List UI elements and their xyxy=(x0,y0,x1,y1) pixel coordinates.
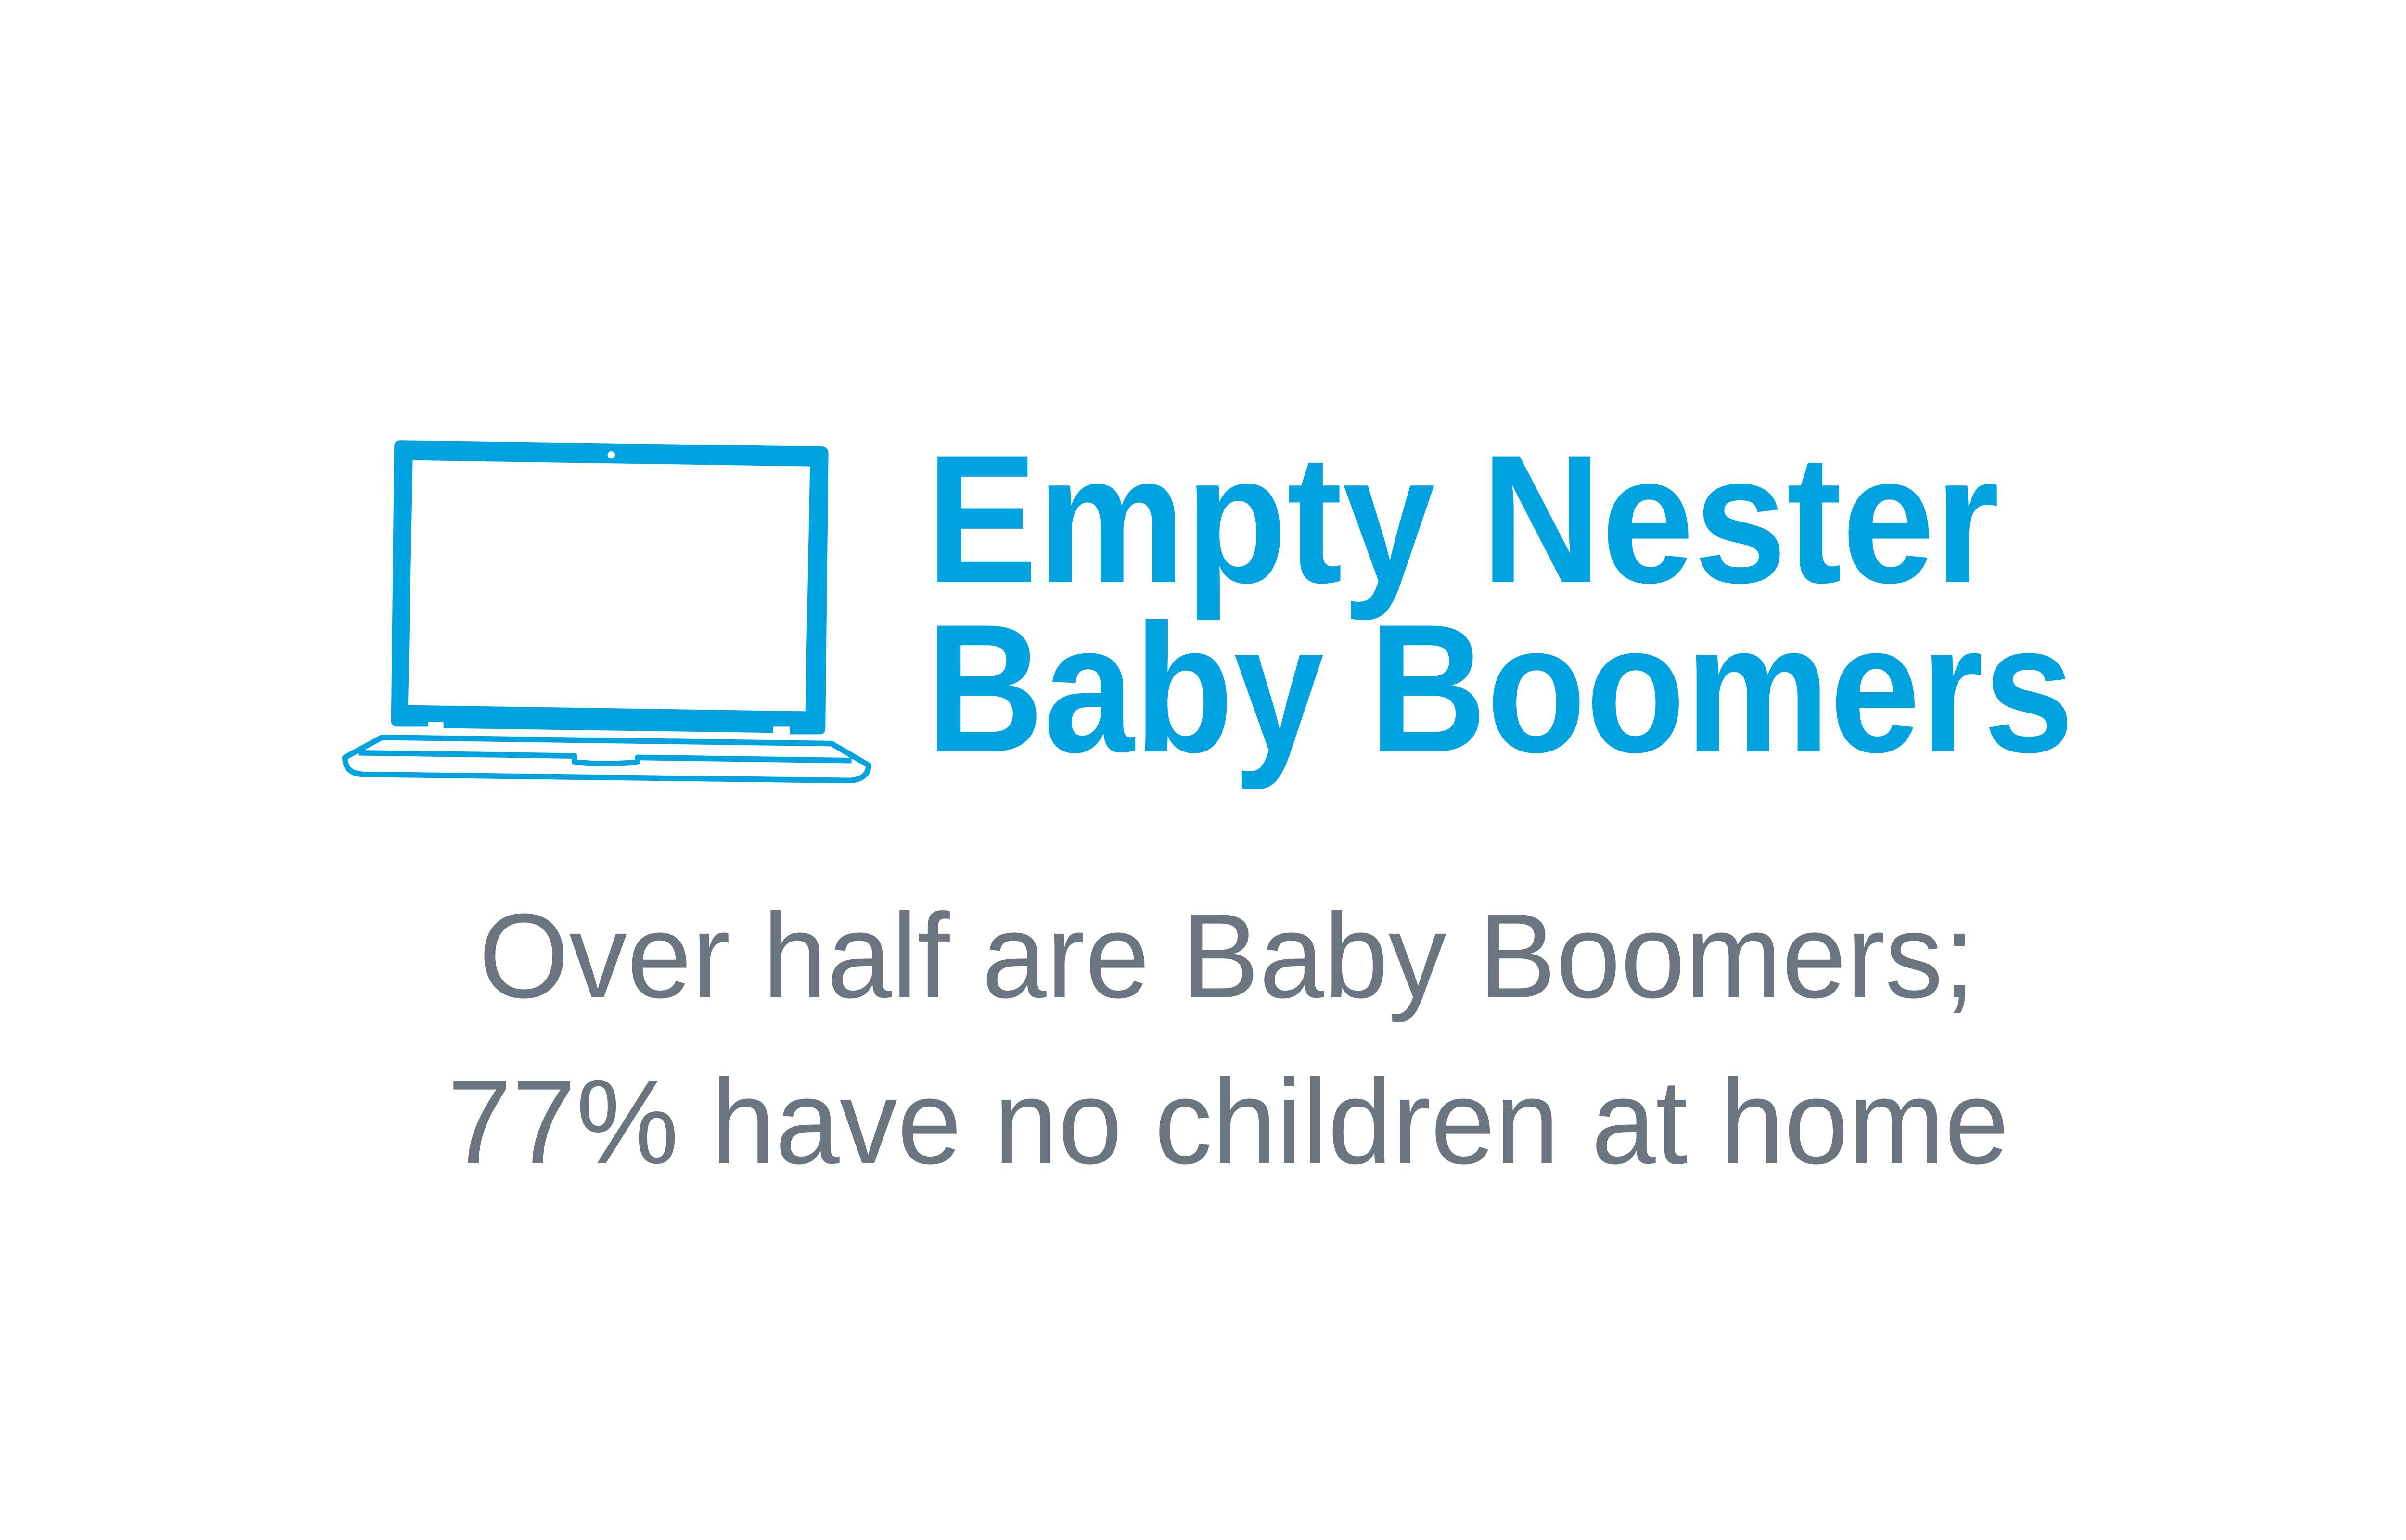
laptop screen xyxy=(391,440,829,734)
subtitle text xyxy=(448,889,2009,1189)
subtitle text: Over half are Baby Boomers; xyxy=(479,889,1975,1023)
title: Baby Boomers xyxy=(926,586,2074,791)
subtitle text: 77% have no children at home xyxy=(448,1055,2009,1189)
icon: laptop xyxy=(345,440,869,780)
title xyxy=(926,417,2074,791)
title: Empty Nester xyxy=(926,417,1999,622)
laptop base xyxy=(345,738,869,780)
